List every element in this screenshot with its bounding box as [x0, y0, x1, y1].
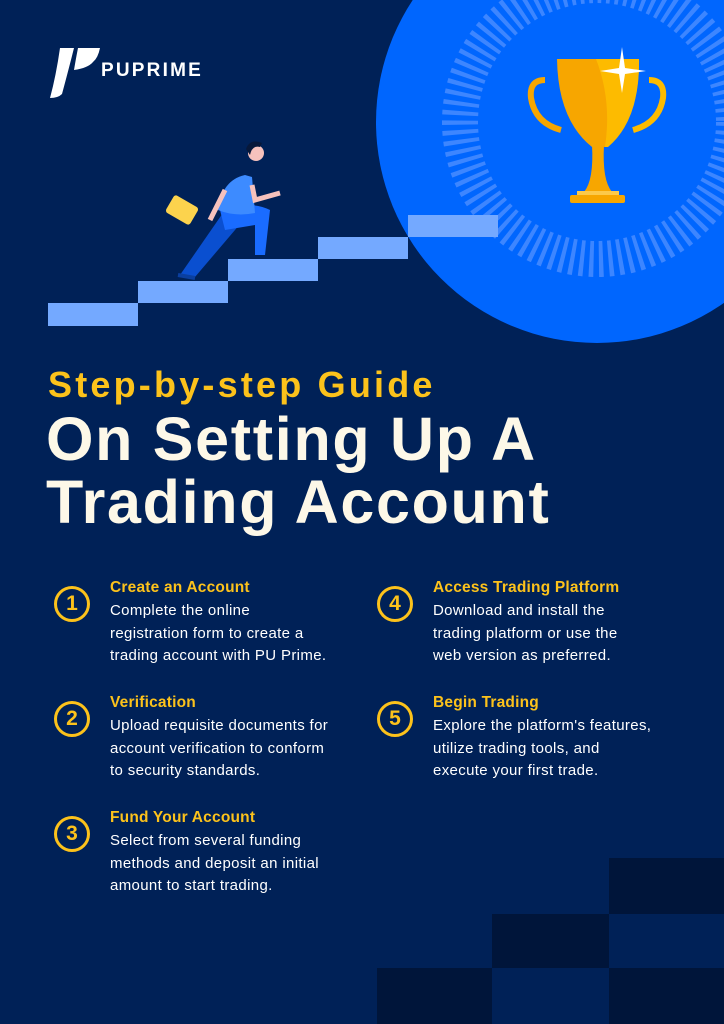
logo: PUPRIME — [101, 60, 203, 81]
step 4: web version as preferred. — [433, 647, 611, 664]
logo — [50, 48, 203, 98]
illustration: climbing man — [166, 142, 281, 280]
trophy circle — [376, 0, 724, 343]
step 2: account verification to conform — [110, 740, 324, 756]
subtitle: Step-by-step Guide — [48, 364, 436, 405]
title: Trading Account — [46, 468, 550, 536]
step 4: Download and install the — [433, 602, 605, 619]
step 2 — [54, 694, 328, 779]
step 3: Select from several funding — [110, 832, 301, 849]
step 1 — [54, 579, 326, 664]
step 2: Verification — [110, 694, 196, 711]
step 1: Complete the online — [110, 602, 250, 619]
step 3: amount to start trading. — [110, 877, 273, 894]
step 1: 1 — [66, 592, 78, 615]
step 5: 5 — [389, 707, 401, 730]
step 2: Upload requisite documents for — [110, 717, 328, 734]
step 2: 2 — [66, 707, 78, 730]
step 5: utilize trading tools, and — [433, 740, 600, 756]
stairs — [48, 215, 498, 326]
step 1: Create an Account — [110, 579, 250, 596]
step 5 — [377, 694, 651, 779]
title: On Setting Up A — [46, 405, 537, 473]
step 3: Fund Your Account — [110, 809, 255, 826]
step 4: trading platform or use the — [433, 624, 618, 642]
step 2: to security standards. — [110, 762, 260, 779]
step 5: execute your first trade. — [433, 762, 598, 779]
step 5: Begin Trading — [433, 694, 539, 711]
step 1: trading account with PU Prime. — [110, 647, 326, 664]
step 3: methods and deposit an initial — [110, 854, 319, 872]
step 4: Access Trading Platform — [433, 579, 619, 596]
step 1: registration form to create a — [110, 624, 304, 642]
background squares — [377, 858, 724, 1024]
step 5: Explore the platform's features, — [433, 717, 651, 734]
title — [46, 405, 550, 536]
step 4: 4 — [389, 592, 401, 615]
step 3: 3 — [66, 822, 78, 845]
step 3 — [54, 809, 319, 894]
step 4 — [377, 579, 619, 664]
icon: trophy — [531, 47, 663, 203]
